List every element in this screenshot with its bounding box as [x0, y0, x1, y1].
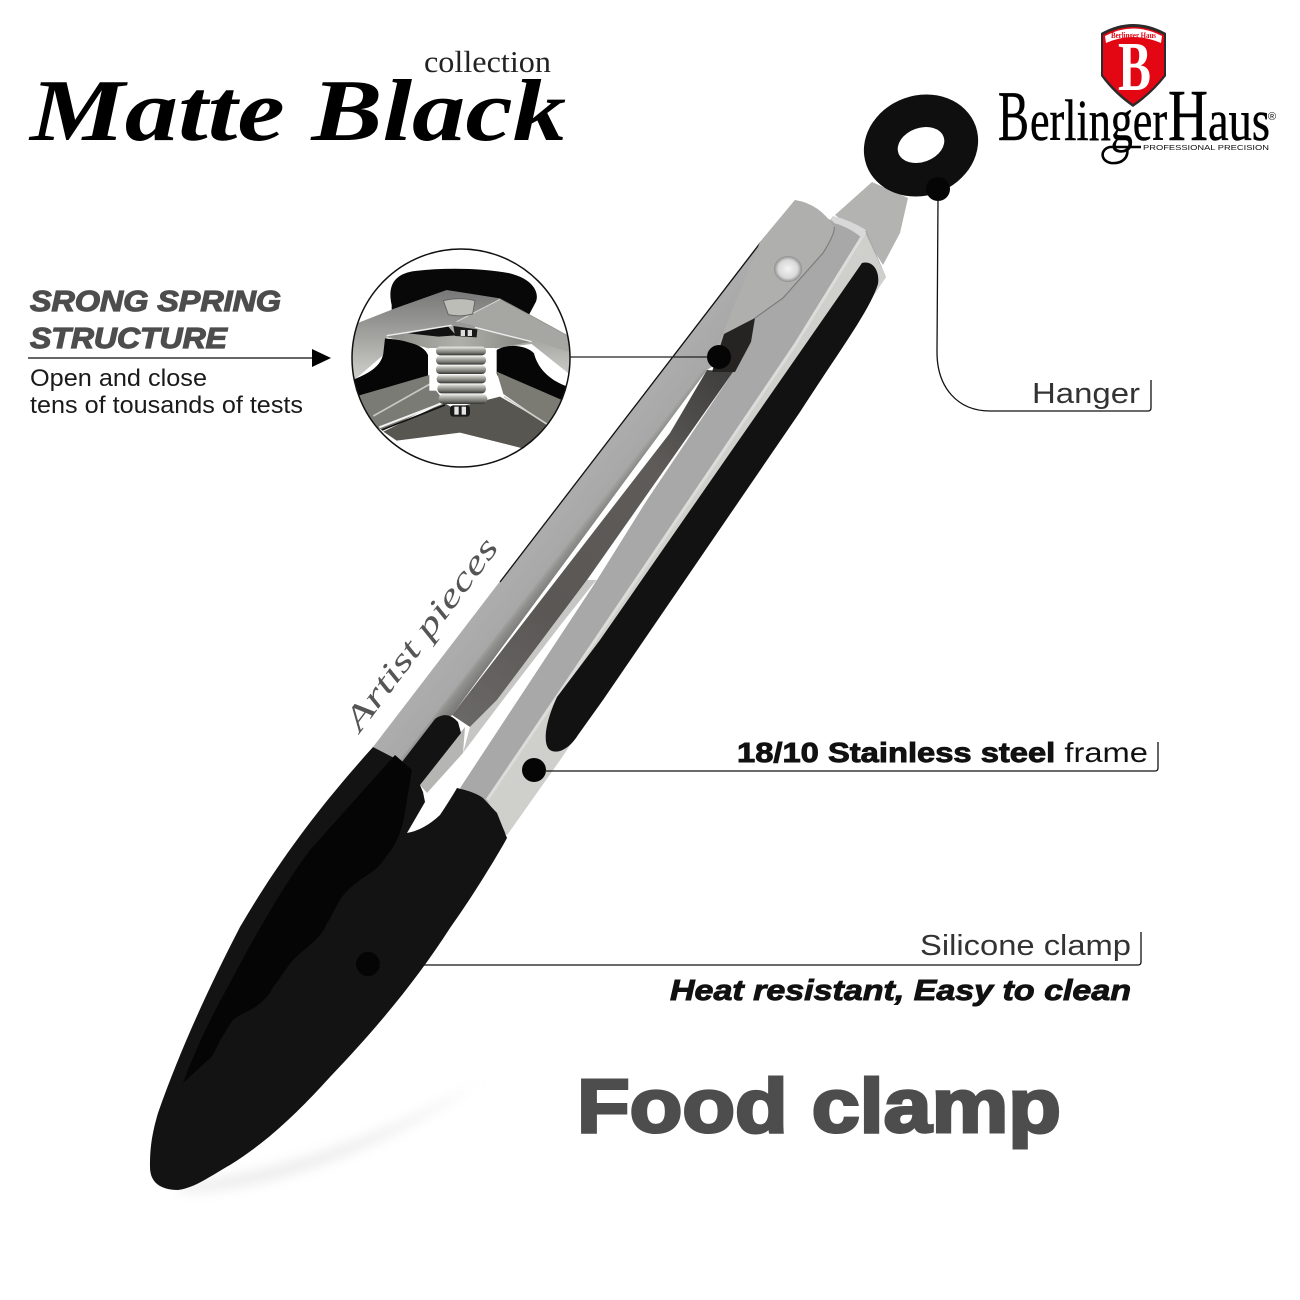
- title: Matte Black collection: [28, 44, 566, 160]
- black arrow slide: [712, 318, 755, 372]
- gap between the arms: [407, 579, 597, 833]
- product name: Food clamp: Food clamp: [577, 1064, 1061, 1149]
- callout: stainless steel frame: 18/10 Stainless steel frame: [737, 737, 1148, 768]
- callout: silicone clamp: Heat resistant, Easy to clean: [670, 975, 1131, 1007]
- icon: red shield: B: [1118, 29, 1151, 106]
- heading: spring structure: STRUCTURE: [30, 323, 229, 355]
- handle grip: black silicone: [546, 262, 878, 752]
- icon: red shield: Berlinger Haus: [1111, 31, 1156, 40]
- hanger ring: black silicone: [849, 79, 993, 212]
- icon: red shield: [1101, 24, 1166, 107]
- wordmark: [998, 75, 1270, 156]
- wordmark: B: [998, 78, 1029, 156]
- rivet: [774, 256, 802, 282]
- food tongs product: [150, 79, 993, 1190]
- wordmark: erlinger: [1030, 88, 1167, 153]
- callout: silicone clamp: [356, 930, 1141, 1007]
- description text: Open and close: [30, 365, 207, 392]
- title: Matte Black collection: collection: [424, 44, 552, 79]
- hanger tip: steel: [835, 182, 908, 265]
- callout: stainless steel frame: [522, 737, 1158, 782]
- inset: spring detail circle: [351, 248, 571, 468]
- inner flange strip: [463, 580, 597, 753]
- arrow: [28, 349, 331, 367]
- logo: BerlingerHaus: [998, 24, 1276, 163]
- heading: spring structure: SRONG SPRING: [30, 286, 281, 318]
- callout: hanger: [926, 177, 1151, 411]
- description text: tens of tousands of tests: [30, 392, 303, 419]
- wordmark: aus: [1208, 88, 1270, 153]
- center slot: dark steel: [452, 370, 733, 727]
- description text: [30, 365, 303, 419]
- clamp head: black silicone: [150, 715, 507, 1190]
- logo: BerlingerHaus: ®: [1268, 111, 1276, 123]
- clamp inner fold: darker: [183, 755, 412, 1083]
- callout: spring structure: [28, 286, 331, 419]
- callout: silicone clamp: Silicone clamp: [920, 930, 1131, 962]
- callout: hanger: Hanger: [1032, 378, 1140, 410]
- shadow under clamp: [180, 1080, 480, 1192]
- right arm: steel: [460, 216, 886, 835]
- left arm: steel: [373, 200, 834, 762]
- handwriting: Artist pieces: Artist pieces: [336, 531, 506, 740]
- hanger hole: [893, 121, 949, 169]
- title: Matte Black collection: Matte Black: [28, 63, 566, 160]
- logo: BerlingerHaus: PROFESSIONAL PRECISION: [1143, 145, 1269, 152]
- top plate: steel: [715, 200, 834, 352]
- wordmark: H: [1168, 75, 1208, 156]
- heading: spring structure: [30, 286, 281, 355]
- silver bridge strip: [420, 727, 465, 793]
- leader: spring line and dot: [570, 345, 731, 369]
